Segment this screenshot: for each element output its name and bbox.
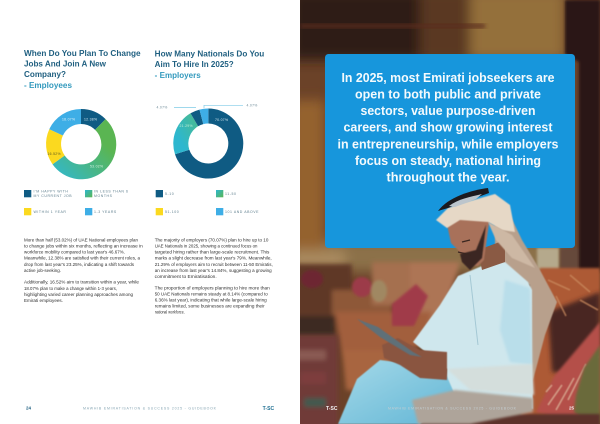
text block: employers analysis: remains limited, some businesses are expanding their: [155, 304, 265, 309]
footer: left page: MAWHIB EMIRATISATION & SUCCESS 2025 - GUIDEBOOK: [83, 406, 217, 410]
photo background: sofas and cushions: [290, 262, 460, 392]
legend: employees: WITHIN 1 YEAR: [34, 210, 66, 214]
donut chart: employers: 4.07%: [156, 105, 168, 109]
donut chart: employees: 18.07%: [62, 118, 75, 122]
donut chart: employees: 12.38%: [84, 118, 97, 122]
heading: employee question: [24, 49, 141, 90]
text block: employees analysis: [24, 237, 143, 303]
heading: employee question: Jobs And Join A New: [24, 60, 107, 68]
photo: red patterned sofa on right: [520, 268, 600, 424]
text block: employees analysis: More than half (53.02%) of UAE National employees plan: [24, 237, 138, 242]
photo: man in kandura using tablet: [338, 188, 557, 424]
legend: employees: MY CURRENT JOB: [34, 194, 72, 198]
donut chart: employees: 53.02%: [90, 164, 103, 168]
text block: employees analysis: active job-seeking.: [24, 268, 61, 273]
heading: employer question: Aim To Hire In 2025?: [155, 60, 234, 69]
donut chart: employers: 70.07%: [215, 118, 228, 122]
text block: employers analysis: The majority of employers (70.07%) plan to hire up to 10: [155, 237, 269, 242]
callout: key insight box: [325, 54, 575, 248]
text block: employers analysis: marks a slight decrease from last year's 79%. Meanwhile,: [155, 256, 272, 261]
photo background: carpet: [300, 333, 338, 424]
text block: employees analysis: Additionally, 16.52% aim to transition within a year, while: [24, 280, 139, 285]
legend: employees: MONTHS: [94, 194, 113, 198]
legend: employees: [24, 190, 128, 215]
legend: employers: [156, 190, 259, 215]
text block: employers analysis: an increase from last year's 14.84%, suggesting a growing: [155, 268, 272, 273]
legend: employers: 5-10: [165, 192, 174, 196]
footer: right page: 25: [569, 406, 575, 410]
legend: employees: IN LESS THAN 6: [94, 190, 128, 194]
donut chart: employers: [156, 104, 258, 178]
text block: employers analysis: commitment to Emiratisation.: [155, 274, 217, 279]
heading: employee question: - Employees: [24, 81, 73, 90]
donut chart: employees: 16.52%: [48, 152, 61, 156]
footer: right page: [326, 406, 575, 412]
legend: employees: I'M HAPPY WITH: [34, 190, 68, 194]
legend: employers: 11-50: [225, 192, 236, 196]
text block: employees analysis: Meanwhile, 12.38% are satisfied with their current roles, a: [24, 256, 140, 261]
text block: employers analysis: 21.29% of employers aim to recruit between 11-50 Emiratis,: [155, 262, 273, 267]
heading: employer question: How Many Nationals Do You: [155, 50, 264, 58]
callout: key insight box: in entrepreneurship, while employers: [338, 138, 558, 152]
footer: right page: MAWHIB EMIRATISATION & SUCCESS 2025 - GUIDEBOOK: [388, 406, 517, 410]
heading: employee question: When Do You Plan To Change: [24, 49, 141, 58]
text block: employers analysis: UAE Nationals in 2025, showing a continued focus on: [155, 244, 258, 248]
text block: employees analysis: Emirati employees.: [24, 298, 63, 303]
callout: key insight box: throughout the year.: [386, 170, 510, 184]
footer: right page: T-SC: [326, 406, 338, 412]
text block: employers analysis: [155, 237, 273, 315]
callout: key insight box: focus on steady, national hiring: [355, 154, 541, 168]
callout: key insight box: In 2025, most Emirati jobseekers are: [342, 71, 554, 85]
heading: employer question: [155, 50, 264, 80]
donut chart: employees: [46, 109, 116, 179]
photo background: ceiling and walls: [290, 0, 565, 272]
text block: employers analysis: 50 UAE Nationals remains steady at 8.14% (compared to: [155, 292, 268, 297]
legend: employers: 101 AND ABOVE: [225, 210, 259, 214]
donut chart: employers: 21.29%: [180, 124, 193, 128]
photo: room background with sofas and carpet: [290, 0, 600, 424]
text block: employers analysis: The proportion of employers planning to hire more than: [155, 286, 270, 291]
callout: key insight box: careers, and show growing interest: [344, 121, 553, 135]
legend: employees: 1-3 YEARS: [94, 210, 117, 214]
text block: employers analysis: national workforce.: [155, 310, 185, 315]
text block: employees analysis: highlighting varied career planning approaches among: [24, 292, 133, 297]
footer: left page: [26, 406, 274, 412]
text block: employees analysis: 18.07% plan to make a change within 1-3 years,: [24, 286, 117, 291]
callout: key insight box: sectors, value purpose-driven: [360, 104, 536, 118]
text block: employees analysis: drop from last year's 23.25%, indicating a shift towards: [24, 262, 135, 267]
heading: employee question: Company?: [24, 70, 66, 79]
text block: employers analysis: targeted hiring rather than large-scale recruitment. This: [155, 250, 270, 255]
legend: employers: 51-100: [165, 210, 179, 214]
footer: left page: 24: [26, 406, 32, 410]
callout: key insight box: open to both public and private: [355, 88, 541, 102]
donut chart: employers: 4.07%: [246, 104, 258, 108]
footer: left page: T-SC: [263, 406, 274, 412]
text block: employees analysis: to change jobs within six months, reflecting an increase in: [24, 244, 143, 248]
heading: employer question: - Employers: [155, 71, 201, 80]
text block: employees analysis: workforce mobility compared to last year's 46.67%.: [24, 250, 125, 255]
page: left white page: [0, 0, 300, 424]
text block: employers analysis: 6.36% last year), indicating that while large-scale hiring: [155, 298, 267, 303]
